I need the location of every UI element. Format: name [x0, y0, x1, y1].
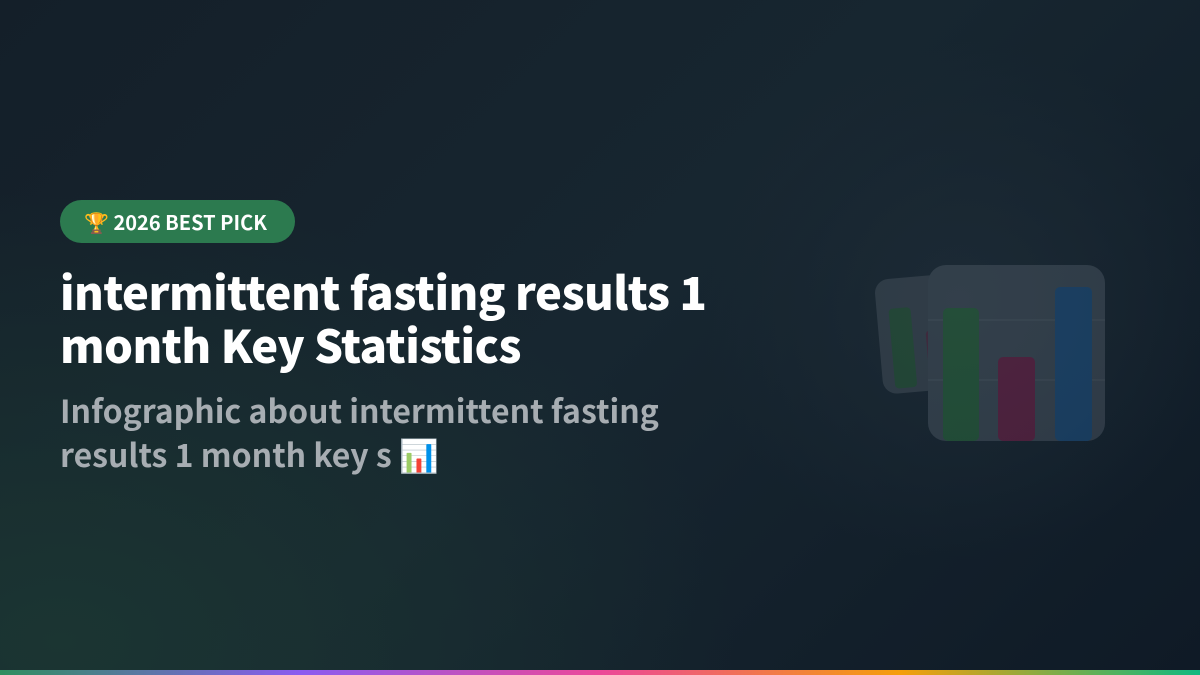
icon: faded bar chart [875, 265, 1105, 441]
subtitle: results 1 month key s 📊 [60, 431, 439, 477]
subtitle [60, 387, 659, 477]
rainbow bottom bar [0, 670, 1200, 675]
title [60, 258, 706, 377]
badge [60, 200, 295, 243]
subtitle: Infographic about intermittent fasting [60, 387, 659, 433]
badge: 🏆 2026 BEST PICK [84, 207, 267, 236]
title: intermittent fasting results 1 [60, 258, 706, 324]
title: month Key Statistics [60, 311, 521, 377]
